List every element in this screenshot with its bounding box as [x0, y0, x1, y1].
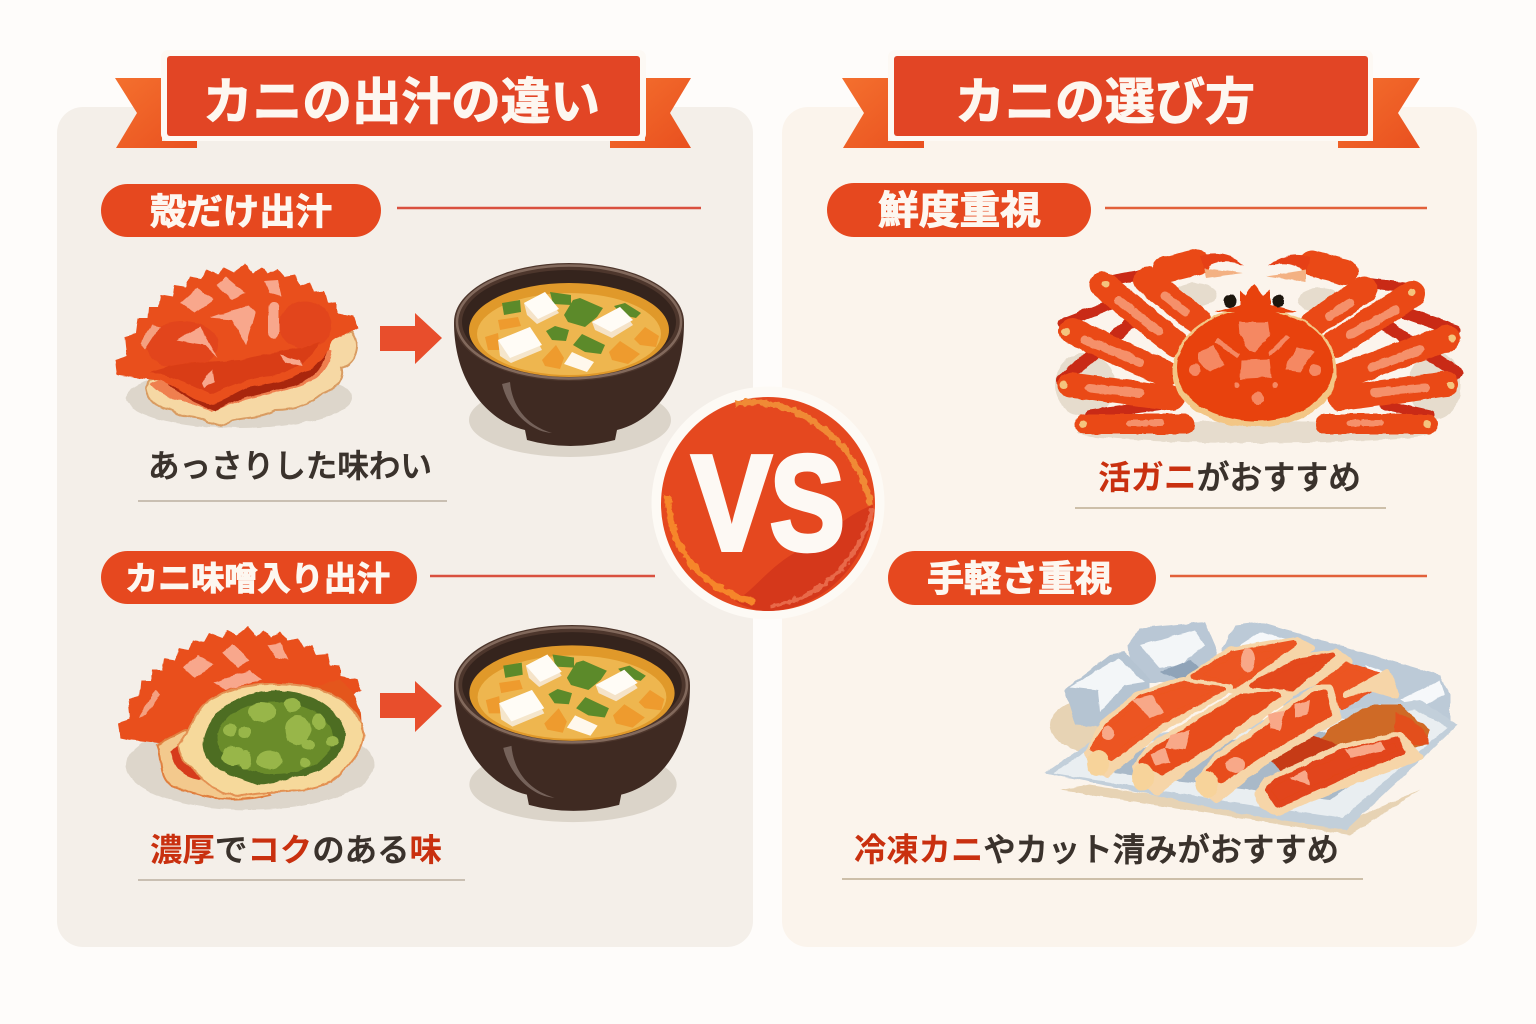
caption: live crab recommended: 活ガニがおすすめ [1098, 459, 1361, 496]
section pill: shell only dashi [101, 184, 381, 237]
section pill: convenience [888, 551, 1156, 605]
section pill: shell only dashi: 殻だけ出汁 [150, 191, 332, 232]
arrow: shell to soup [380, 313, 442, 364]
arrow: miso shell to soup [380, 681, 442, 732]
VS badge [652, 386, 884, 620]
VS text: V [692, 427, 771, 578]
heading ribbon: right [842, 50, 1420, 148]
section pill: with crab miso dashi: カニ味噌入り出汁 [125, 560, 390, 597]
carrots [485, 317, 659, 369]
title: left: カニの出汁の違い [203, 74, 600, 130]
section pill: convenience: 手軽さ重視 [927, 558, 1112, 599]
section pill: freshness [827, 183, 1091, 237]
VS text [692, 427, 845, 579]
illustration: empty crab shell [115, 264, 358, 428]
illustration: frozen cut crab on tray [1045, 622, 1458, 835]
illustration: miso soup bowl [454, 263, 684, 457]
section pill: with crab miso dashi [101, 551, 417, 604]
crab legs [1087, 640, 1420, 813]
tofu [498, 292, 633, 372]
illustration: crab shell with green miso [118, 627, 374, 810]
panel: left dashi comparison [57, 107, 753, 947]
section pill: freshness: 鮮度重視 [878, 190, 1041, 233]
greens [502, 292, 641, 354]
illustration: live snow crab [1055, 253, 1461, 443]
illustration: rich miso soup bowl [454, 625, 690, 822]
caption: light flavour: あっさりした味わい [148, 448, 432, 484]
caption: frozen or pre-cut crab recommended: 冷凍カニやカット清みがおすすめ [854, 832, 1339, 868]
title: right: カニの選び方 [955, 74, 1255, 130]
panel: right crab selection [782, 107, 1477, 947]
VS text: S [770, 429, 845, 579]
caption: rich flavour: 濃厚でコクのある味 [150, 832, 442, 868]
heading ribbon: left [115, 50, 691, 148]
